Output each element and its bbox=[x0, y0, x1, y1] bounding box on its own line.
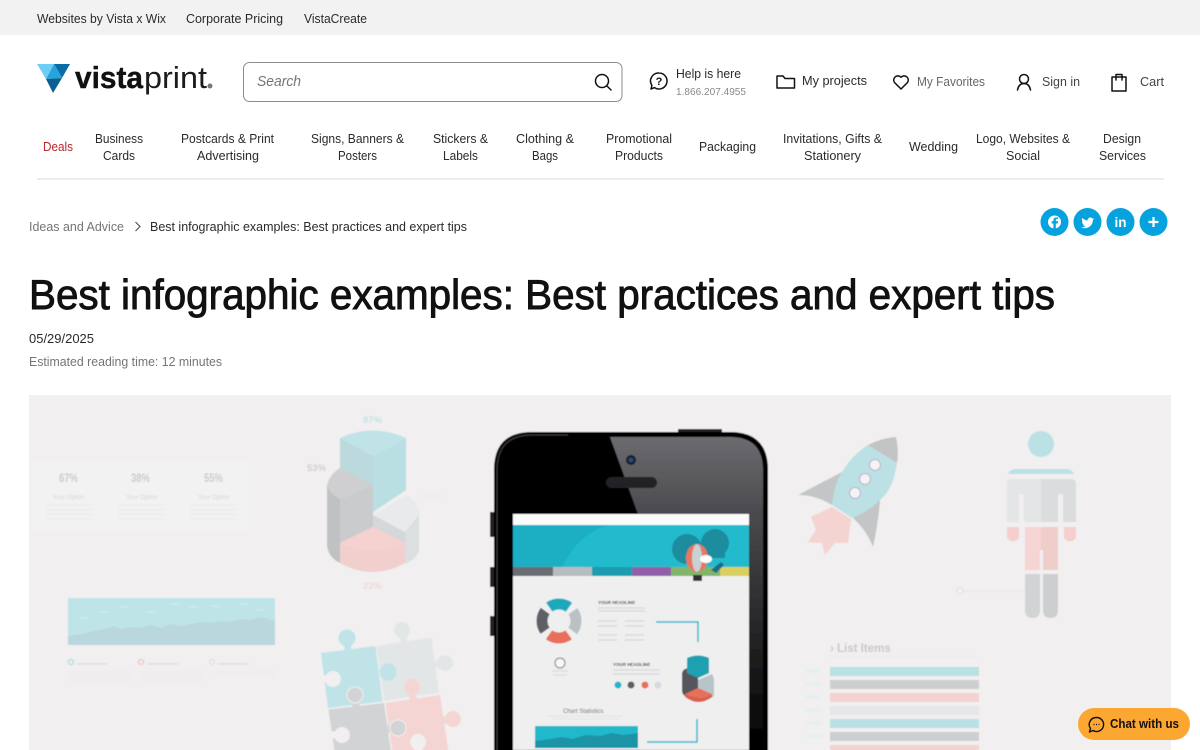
main navigation: Promotional bbox=[606, 132, 672, 146]
logo: vistaprint bbox=[37, 60, 212, 95]
main navigation: Bags bbox=[532, 149, 558, 163]
main navigation: Packaging bbox=[699, 140, 756, 154]
cart bbox=[1112, 74, 1165, 91]
logo: vistaprint: print bbox=[144, 60, 207, 95]
top utility bar: Websites by Vista x Wix bbox=[37, 12, 167, 26]
main navigation: Labels bbox=[443, 149, 478, 163]
hero image bbox=[20, 388, 1180, 750]
breadcrumb: Ideas and Advice bbox=[29, 220, 124, 234]
phone headline two: YOUR HEADLINE bbox=[613, 662, 650, 667]
faded percentage table bbox=[54, 473, 228, 500]
phone screen bbox=[513, 514, 749, 750]
search box: Search bbox=[257, 74, 301, 90]
faded 3D pie chart: 21% bbox=[423, 490, 441, 500]
main navigation: Logo, Websites & bbox=[976, 132, 1071, 146]
phone headline two bbox=[613, 662, 662, 688]
main navigation: Deals bbox=[43, 140, 73, 154]
main navigation: Invitations, Gifts & bbox=[783, 132, 883, 146]
main navigation: Products bbox=[615, 149, 663, 163]
faded percentage table: 67% bbox=[59, 473, 78, 485]
cart: Cart bbox=[1140, 75, 1165, 89]
faded percentage table: Your Option bbox=[53, 495, 84, 501]
main navigation: Design bbox=[1103, 132, 1141, 146]
main navigation: Stickers & bbox=[433, 132, 489, 146]
main navigation: Business bbox=[95, 132, 143, 146]
chart statistics: Chart Statistics bbox=[563, 709, 603, 715]
logo: vistaprint: vista bbox=[75, 60, 144, 95]
social share buttons bbox=[1040, 208, 1168, 236]
top utility bar bbox=[0, 0, 1200, 35]
main navigation: Social bbox=[1006, 149, 1040, 163]
mini 3D chart bbox=[682, 656, 714, 702]
main navigation bbox=[43, 132, 1146, 163]
main navigation: Advertising bbox=[197, 149, 259, 163]
balloon illustration bbox=[672, 529, 729, 581]
connector lines bbox=[647, 622, 698, 742]
main navigation: Signs, Banners & bbox=[311, 132, 405, 146]
my favorites: My Favorites bbox=[917, 74, 985, 89]
sign in bbox=[1018, 74, 1080, 90]
my projects: My projects bbox=[802, 74, 867, 88]
faded 3D pie chart: 22% bbox=[363, 581, 383, 592]
faded list items bbox=[806, 643, 979, 750]
chat with us button bbox=[1078, 708, 1190, 740]
main navigation: Stationery bbox=[804, 149, 862, 163]
faded percentage table: Your Option bbox=[198, 495, 229, 501]
faded rocket bbox=[798, 437, 898, 555]
social share buttons: in bbox=[1114, 215, 1126, 230]
reading time: Estimated reading time: 12 minutes bbox=[29, 355, 222, 369]
top utility bar: Corporate Pricing bbox=[186, 12, 283, 26]
top utility bar: VistaCreate bbox=[304, 12, 367, 26]
faded 3D pie chart: 87% bbox=[363, 415, 383, 426]
main navigation: Postcards & Print bbox=[181, 132, 274, 146]
chart statistics bbox=[535, 709, 638, 748]
faded human figure bbox=[957, 431, 1076, 618]
main navigation: Cards bbox=[103, 149, 135, 163]
main navigation: Services bbox=[1099, 149, 1146, 163]
small gauge bbox=[552, 658, 568, 675]
main navigation: Clothing & bbox=[516, 132, 575, 146]
faded list items: › List Items bbox=[830, 643, 891, 655]
faded 3D pie chart: 53% bbox=[307, 463, 327, 474]
main navigation: Wedding bbox=[909, 140, 958, 154]
sign in: Sign in bbox=[1042, 75, 1080, 89]
faded puzzle bbox=[321, 622, 461, 750]
faded area chart bbox=[68, 598, 275, 645]
article title: Best infographic examples: Best practices and expert tips bbox=[29, 271, 1055, 318]
faded percentage table: 38% bbox=[131, 473, 150, 485]
faded chart legend bbox=[67, 658, 248, 666]
help block: 1.866.207.4955 bbox=[676, 86, 746, 98]
help block bbox=[651, 67, 746, 98]
search box bbox=[244, 62, 622, 102]
chat with us button: Chat with us bbox=[1110, 717, 1179, 731]
breadcrumb: Best infographic examples: Best practices and expert tips bbox=[150, 220, 467, 234]
phone headline one: YOUR HEADLINE bbox=[598, 600, 635, 605]
donut chart bbox=[535, 597, 583, 645]
help block: ? bbox=[656, 76, 663, 88]
help block: Help is here bbox=[676, 67, 741, 81]
main navigation: Posters bbox=[338, 149, 377, 163]
date: 05/29/2025 bbox=[29, 332, 94, 346]
phone bbox=[490, 429, 768, 750]
phone headline one bbox=[598, 600, 645, 640]
faded percentage table: Your Option bbox=[126, 495, 157, 501]
faded percentage table: 55% bbox=[204, 473, 223, 485]
faded 3D pie chart bbox=[307, 416, 419, 589]
